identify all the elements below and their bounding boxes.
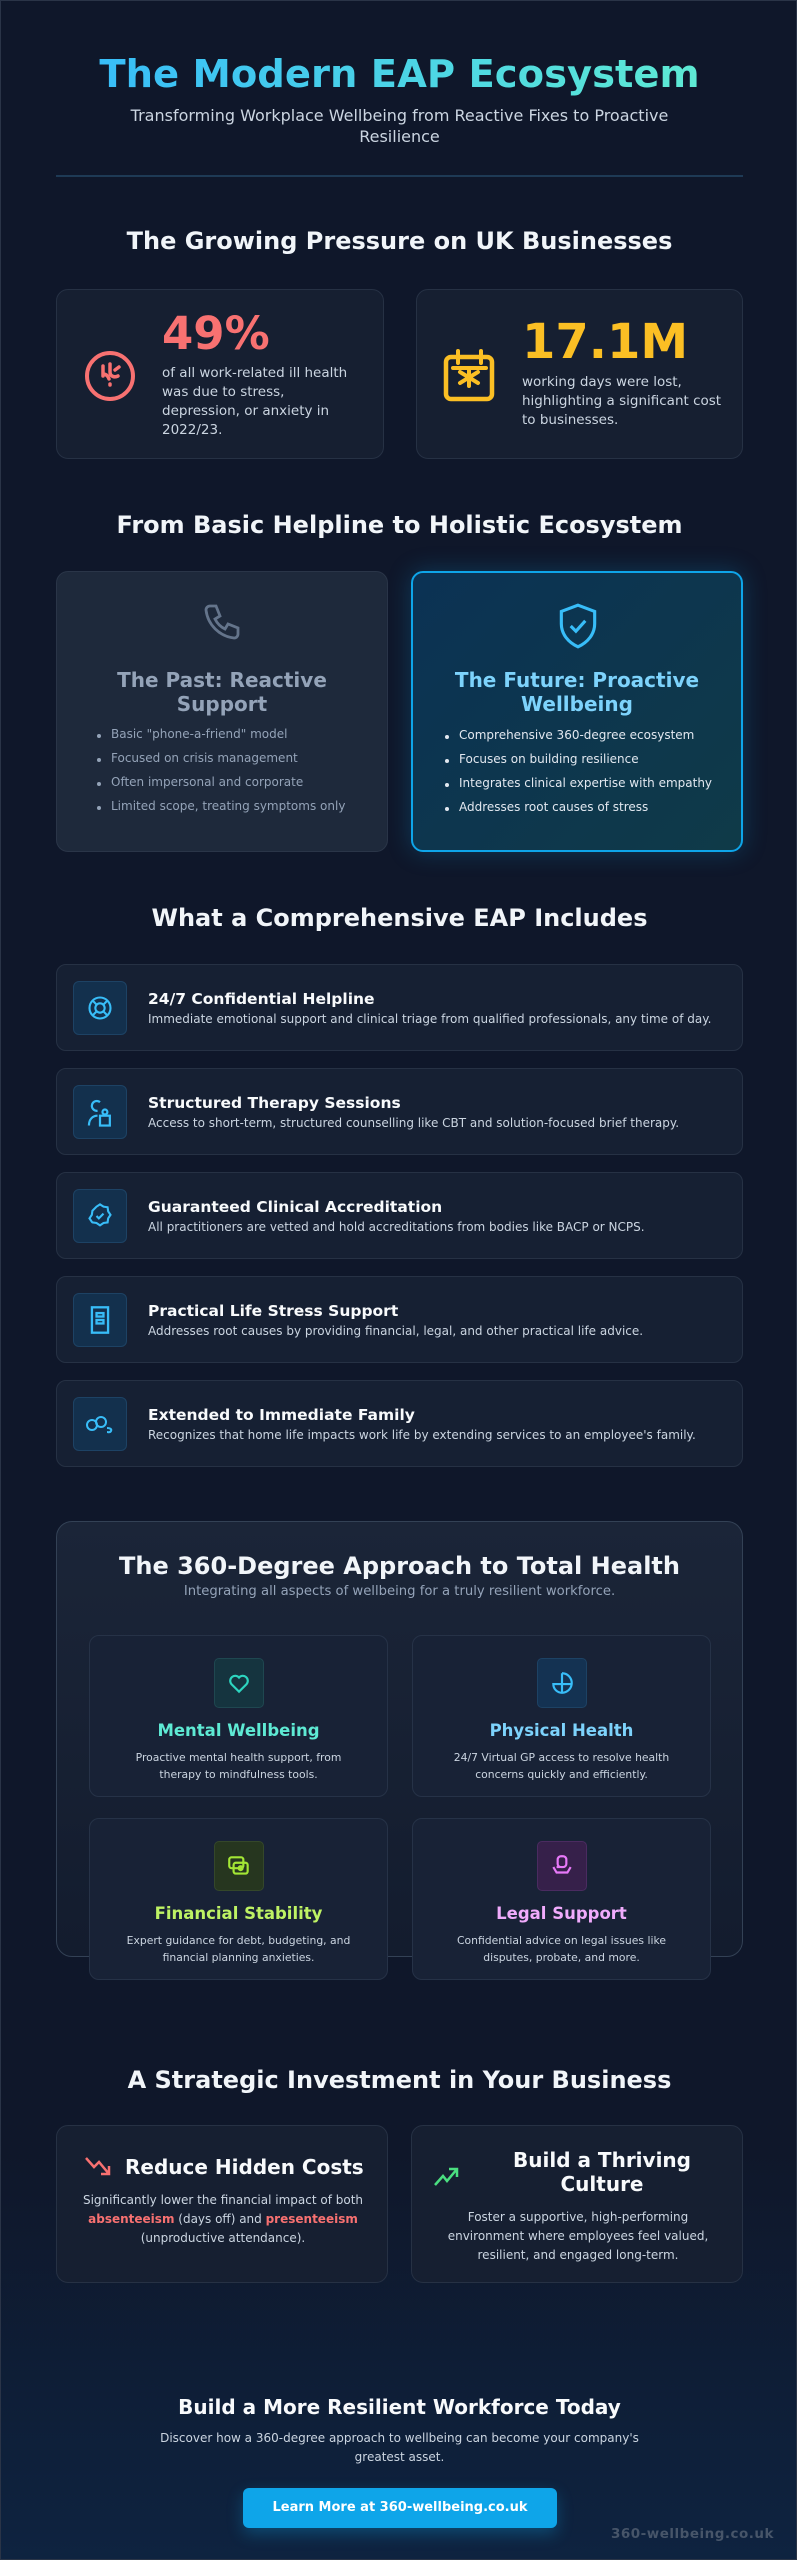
feature: family: Extended to Immediate Family	[148, 1406, 415, 1424]
icon: phone	[204, 604, 240, 640]
heading: future: The Future: Proactive	[455, 668, 699, 692]
subtitle: Transforming Workplace Wellbeing from Reactive Fixes to Proactive Resilience	[131, 106, 668, 146]
card: mental	[89, 1635, 388, 1797]
heading: future	[454, 668, 699, 716]
list: past: Often impersonal and corporate	[111, 775, 303, 789]
icon: lifebuoy	[73, 981, 127, 1035]
card: physical: Physical Health	[490, 1721, 633, 1740]
icon: heart	[214, 1658, 264, 1708]
title: The Modern EAP Ecosystem	[99, 52, 700, 97]
stat text: of all work-related ill health was due to stress, depression, or anxiety in 2022/23.	[162, 365, 347, 438]
card: physical	[412, 1635, 711, 1797]
panel: past	[56, 571, 388, 852]
icon: trend down	[85, 2157, 110, 2176]
stat value: 17.1M	[522, 314, 688, 370]
icon: stress	[85, 351, 135, 401]
card: financial	[89, 1818, 388, 1980]
list: past: Basic "phone-a-friend" model	[111, 727, 287, 741]
feature: accreditation: All practitioners are vetted and hold accreditations from bodies like BACP or NCPS.	[148, 1220, 645, 1234]
card: reduce costs: Reduce Hidden Costs	[125, 2155, 364, 2179]
card: physical: 24/7 Virtual GP access to resolve health concerns quickly and efficiently.	[454, 1751, 669, 1781]
heading: past: Support	[177, 692, 267, 716]
CTA heading: Build a More Resilient Workforce Today	[178, 2395, 621, 2419]
panel: 360-degree approach	[56, 1521, 743, 1957]
heading: future: Wellbeing	[521, 692, 633, 716]
stat card: 17.1M	[416, 289, 743, 459]
icon: family	[73, 1397, 127, 1451]
feature: helpline	[56, 964, 743, 1051]
card: legal: Legal Support	[496, 1904, 627, 1923]
stat card: 49%	[56, 289, 384, 459]
card: thriving culture: Build a Thriving Culture	[513, 2148, 691, 2196]
footer brand: 360-wellbeing.co.uk	[611, 2526, 774, 2542]
heading: past	[117, 668, 327, 716]
stat text: working days were lost, highlighting a significant cost to businesses.	[522, 374, 721, 428]
card: legal	[412, 1818, 711, 1980]
card: legal: Confidential advice on legal issues like disputes, probate, and more.	[457, 1934, 666, 1964]
list: future: Addresses root causes of stress	[459, 800, 648, 814]
icon: money	[214, 1841, 264, 1891]
list: future	[445, 728, 712, 814]
icon: badge	[73, 1189, 127, 1243]
list: past	[97, 727, 345, 813]
list: past: Focused on crisis management	[111, 751, 298, 765]
feature: helpline: 24/7 Confidential Helpline	[148, 990, 375, 1008]
CTA text: Discover how a 360-degree approach to wellbeing can become your company's greatest asset.	[160, 2431, 639, 2464]
icon: calendar	[444, 349, 494, 402]
feature: therapy: Structured Therapy Sessions	[148, 1094, 401, 1112]
icon: shield	[560, 604, 596, 648]
feature: life stress: Practical Life Stress Support	[148, 1302, 398, 1320]
list: future: Comprehensive 360-degree ecosystem	[459, 728, 694, 742]
card: thriving culture	[411, 2125, 743, 2283]
card: reduce costs	[56, 2125, 388, 2283]
card: financial: Expert guidance for debt, budgeting, and financial planning anxieties.	[127, 1934, 350, 1964]
feature: life stress	[56, 1276, 743, 1363]
text: culture: Foster a supportive, high-performing environment where employees feel valued, resilient, and engaged long-term.	[448, 2210, 708, 2262]
icon: physical	[537, 1658, 587, 1708]
CTA button	[243, 2488, 557, 2528]
icon: legal	[537, 1841, 587, 1891]
heading: growing pressure: The Growing Pressure on UK Businesses	[127, 227, 672, 255]
subheading: 360: Integrating all aspects of wellbeing for a truly resilient workforce.	[184, 1584, 615, 1599]
icon: trend up	[434, 2168, 458, 2186]
feature: therapy: Access to short-term, structured counselling like CBT and solution-focused brief therapy.	[148, 1116, 679, 1130]
icon: person	[73, 1085, 127, 1139]
list: future: Focuses on building resilience	[459, 752, 639, 766]
CTA button: Learn More at 360-wellbeing.co.uk	[272, 2500, 528, 2515]
list: past: Limited scope, treating symptoms only	[111, 799, 345, 813]
heading: past: The Past: Reactive	[117, 668, 327, 692]
text: reduce costs: Significantly lower the financial impact of both absenteeism (days off) and presenteeism (unproductive attendance).	[83, 2193, 363, 2245]
feature: accreditation: Guaranteed Clinical Accreditation	[148, 1198, 442, 1216]
stat value: 49%	[162, 307, 270, 360]
feature: life stress: Addresses root causes by providing financial, legal, and other practical life advice.	[148, 1324, 643, 1338]
list: future: Integrates clinical expertise with empathy	[459, 776, 712, 790]
icon: cabinet	[73, 1293, 127, 1347]
card: financial: Financial Stability	[155, 1904, 322, 1923]
card: mental: Proactive mental health support, from therapy to mindfulness tools.	[136, 1751, 341, 1781]
heading: comprehensive EAP: What a Comprehensive EAP Includes	[152, 904, 647, 932]
heading: helpline to ecosystem: From Basic Helpline to Holistic Ecosystem	[116, 511, 683, 539]
feature: accreditation	[56, 1172, 743, 1259]
panel: future	[411, 571, 743, 852]
heading: 360: The 360-Degree Approach to Total Health	[119, 1552, 680, 1580]
heading: strategic investment: A Strategic Investment in Your Business	[128, 2066, 671, 2094]
feature: family: Recognizes that home life impacts work life by extending services to an employee's family.	[148, 1428, 696, 1442]
feature: helpline: Immediate emotional support and clinical triage from qualified professionals, any time of day.	[148, 1012, 711, 1026]
card: mental: Mental Wellbeing	[157, 1721, 320, 1740]
feature: therapy	[56, 1068, 743, 1155]
feature: family	[56, 1380, 743, 1467]
